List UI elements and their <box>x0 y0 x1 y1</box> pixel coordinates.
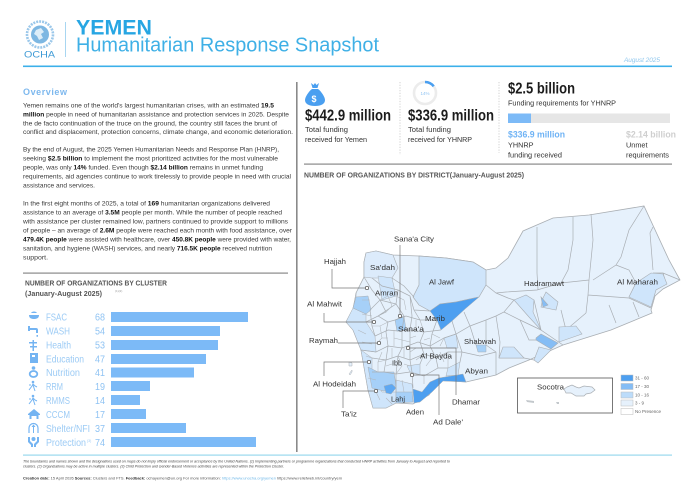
KPI: total funding YHNRP: $336.9 million <box>408 108 494 124</box>
map labels: Sana'a <box>398 324 425 334</box>
row: CCCM <box>28 409 146 421</box>
overview text: Yemen remains one of the world's largest humanitarian crises, with an estimated 19.5 <box>23 102 274 110</box>
map legend: 17 - 30 <box>635 384 650 389</box>
row: RMMS: 14 <box>95 396 105 407</box>
title: YEMEN <box>76 16 152 40</box>
map labels: Al Mahwit <box>307 300 342 308</box>
overview text: with assistance per cluster remained low, partners continued to provide support to millions <box>22 218 289 226</box>
KPI: funding requirements: Unmet <box>626 140 648 150</box>
icon: OCHA logo <box>24 22 55 60</box>
KPI: funding requirements: $2.14 billion <box>626 130 676 140</box>
row: WASH: 54 <box>95 326 105 338</box>
cluster chart heading: NUMBER OF ORGANIZATIONS BY CLUSTER <box>25 280 167 288</box>
map labels: Lahj <box>391 394 405 404</box>
funding progress bar <box>508 114 670 123</box>
map labels: Shabwah <box>464 337 496 346</box>
overview text: assistance and services. <box>23 182 95 190</box>
districts: dense western cells <box>358 284 448 404</box>
map labels: Hajjah <box>324 257 346 266</box>
islands <box>349 362 352 375</box>
footnotes: The boundaries and names shown and the designations used on maps do not imply official endorsement or acceptance by the United Nations. (1) Implementing partners or programme organizations that conducted HNRP activities from January to August and reported to <box>23 458 451 464</box>
KPI: total funding Yemen <box>305 83 391 144</box>
overview heading: Overview <box>23 87 68 97</box>
map labels: Al Bayda <box>420 352 453 360</box>
map labels: Sana'a City <box>394 234 434 244</box>
map labels: Raymah <box>309 336 338 345</box>
leader: Raymah <box>338 341 381 345</box>
row: Protection: (3) <box>87 439 91 443</box>
KPI: total funding YHNRP: Total funding <box>408 125 451 134</box>
footnotes: clusters. (2) Organizations may be active in multiple clusters. (3) Child Protection and Gender-Based Violence activities are represented within the Protection Cluster. <box>23 464 284 468</box>
row: Protection <box>28 437 256 449</box>
map inset: Socotra <box>518 378 612 413</box>
KPI: funding requirements: Funding requirements for YHNRP <box>508 98 616 108</box>
KPI: funding requirements: $2.5 billion <box>508 80 575 98</box>
region: Hadramawt interior districts <box>499 292 582 363</box>
row: Education <box>30 353 206 366</box>
region: Al Maharah south <box>629 273 667 307</box>
footer: sources: Creation date: 15 April 2026 Sources: Clusters and FTS. Feedback: ochayemen@un.org For more information: https://www.unocha.org/yemen https://www.reliefweb.int/country/yem <box>23 476 342 480</box>
overview text: sanitation, and hygiene (WASH) services, and nearly 716.5K people received nutrition <box>23 246 272 252</box>
cluster chart heading: (January-August 2025) <box>25 291 102 298</box>
row: CCCM: CCCM <box>46 410 70 421</box>
date: August 2025 <box>623 57 660 64</box>
region: Marib <box>430 297 479 330</box>
row: Nutrition: 41 <box>95 368 105 379</box>
region: Al Jawf <box>413 256 486 311</box>
overview text: By the end of August, the 2025 Yemen Humanitarian Needs and Response Plan (HNRP), <box>23 146 279 154</box>
map labels: Ta'iz <box>341 410 357 418</box>
row: Nutrition: Nutrition <box>46 368 80 379</box>
overview text: million people in need of humanitarian assistance and protection services in 2025. Despite <box>23 112 289 118</box>
row: Nutrition <box>30 366 194 379</box>
row: RRM <box>29 381 150 393</box>
leader: Dhamar <box>406 346 456 395</box>
map labels: Dhamar <box>452 398 481 406</box>
overview text: of people – an average of 2.6M people were reached each month with food assistance, over <box>23 228 293 234</box>
KPI: funding requirements: funding received <box>508 150 562 160</box>
leader: Sana'a City <box>398 245 402 318</box>
row: Protection: Protection <box>46 438 86 449</box>
title <box>76 16 379 56</box>
map labels: Al Hodeidah <box>313 380 356 388</box>
KPI: total funding Yemen: $442.9 million <box>305 108 391 124</box>
header divider <box>65 22 66 57</box>
row: Education: 47 <box>95 354 105 366</box>
row: FSAC: 68 <box>95 312 105 324</box>
row: WASH <box>28 326 220 338</box>
row: RMMS <box>29 395 140 407</box>
map legend: No Presence <box>635 409 662 414</box>
footnotes <box>23 458 451 468</box>
map labels: Al Jawf <box>429 278 455 286</box>
icon: OCHA logo: OCHA <box>24 50 55 60</box>
KPI: funding requirements <box>508 80 676 160</box>
row: Shelter/NFI: 37 <box>95 424 105 435</box>
row: Shelter/NFI <box>29 423 186 435</box>
row: Education: Education <box>46 354 84 366</box>
map labels: Ibb <box>392 358 402 368</box>
row: FSAC: FSAC <box>46 312 67 324</box>
KPI: total funding YHNRP <box>408 82 494 144</box>
map heading: NUMBER OF ORGANIZATIONS BY DISTRICT(January-August 2025) <box>304 172 524 180</box>
overview text: 479.4K people were assisted with healthcare, over 450.8K people were provided with water, <box>23 236 291 244</box>
row: FSAC <box>29 312 248 324</box>
KPI: total funding YHNRP: received for YHNRP <box>408 135 472 144</box>
cluster chart heading <box>25 280 167 298</box>
KPI: funding requirements: requirements <box>626 150 669 160</box>
icon: money bag: $ <box>312 94 317 104</box>
leader: Al Hodeidah <box>324 360 371 376</box>
overview text: support. <box>23 254 48 262</box>
KPI: funding requirements: $336.9 million <box>508 130 565 140</box>
map labels: Abyan <box>465 366 488 376</box>
leader: Ad Dale' <box>410 373 439 415</box>
row: WASH: WASH <box>46 326 70 338</box>
cluster chart heading: (1)(2) <box>115 289 122 293</box>
leader: Al Mahwit <box>324 313 376 324</box>
leader: Ta'iz <box>343 389 378 408</box>
map labels: Sa'dah <box>370 263 395 272</box>
overview text <box>22 102 293 262</box>
map labels: Ad Dale' <box>433 418 464 426</box>
KPI: total funding Yemen: received for Yemen <box>305 135 367 144</box>
overview text: assistance to an average of 3.5M people per month. While the number of people reached <box>23 210 282 216</box>
KPI: funding requirements: YHNRP <box>508 140 534 150</box>
leader: Hajjah <box>332 269 369 290</box>
map legend: 31 - 60 <box>635 376 650 380</box>
map labels: Hadramawt <box>524 279 564 288</box>
map inset: Socotra: Socotra <box>537 382 565 392</box>
map labels: Amran <box>375 288 398 298</box>
map legend: 10 - 16 <box>635 392 650 398</box>
row: Health: Health <box>46 340 71 352</box>
map: Yemen districts <box>307 206 680 426</box>
map labels <box>307 234 658 426</box>
icon: 14% donut: 14% <box>420 91 430 96</box>
overview text: people, was only 14% funded. Even though $2.14 billion remains in unmet funding <box>23 164 263 172</box>
districts: eastern boundaries <box>486 206 680 360</box>
bar chart: organizations by cluster <box>28 312 256 449</box>
row: RMMS: RMMS <box>46 396 70 407</box>
map labels: Aden <box>406 408 424 416</box>
region: Sa'dah <box>364 251 398 278</box>
districts: highlighted western and southern areas <box>346 276 486 408</box>
districts: western boundaries <box>361 277 500 392</box>
overview text: In the first eight months of 2025, a total of 169 humanitarian organizations delivered <box>23 200 270 208</box>
title: Humanitarian Response Snapshot <box>76 34 379 56</box>
country base <box>346 206 680 408</box>
overview text: requirements, aid agencies continue to work tirelessly to provide people in need with crucial <box>23 174 292 180</box>
map legend <box>621 375 662 414</box>
row: CCCM: 17 <box>95 410 105 421</box>
row: Health: 53 <box>95 340 105 352</box>
map legend: 3 - 9 <box>635 400 645 406</box>
row: Health <box>29 340 218 352</box>
KPI: total funding Yemen: Total funding <box>305 125 348 134</box>
row: Protection: 74 <box>95 438 105 449</box>
map labels: Marib <box>425 314 445 323</box>
overview text: conflict and displacement, protection concerns, climate change, and economic deterioration. <box>23 129 293 136</box>
row: RRM: RRM <box>46 382 63 393</box>
row: Shelter/NFI: Shelter/NFI <box>46 424 90 435</box>
row: RRM: 19 <box>95 382 105 393</box>
overview text: the de facto continuation of the truce on the ground, the country still faces the brunt of <box>23 120 277 128</box>
map labels: Al Maharah <box>617 278 658 286</box>
overview text: seeking $2.5 billion to implement the most prioritized activities for the most vulnerable <box>23 156 278 162</box>
